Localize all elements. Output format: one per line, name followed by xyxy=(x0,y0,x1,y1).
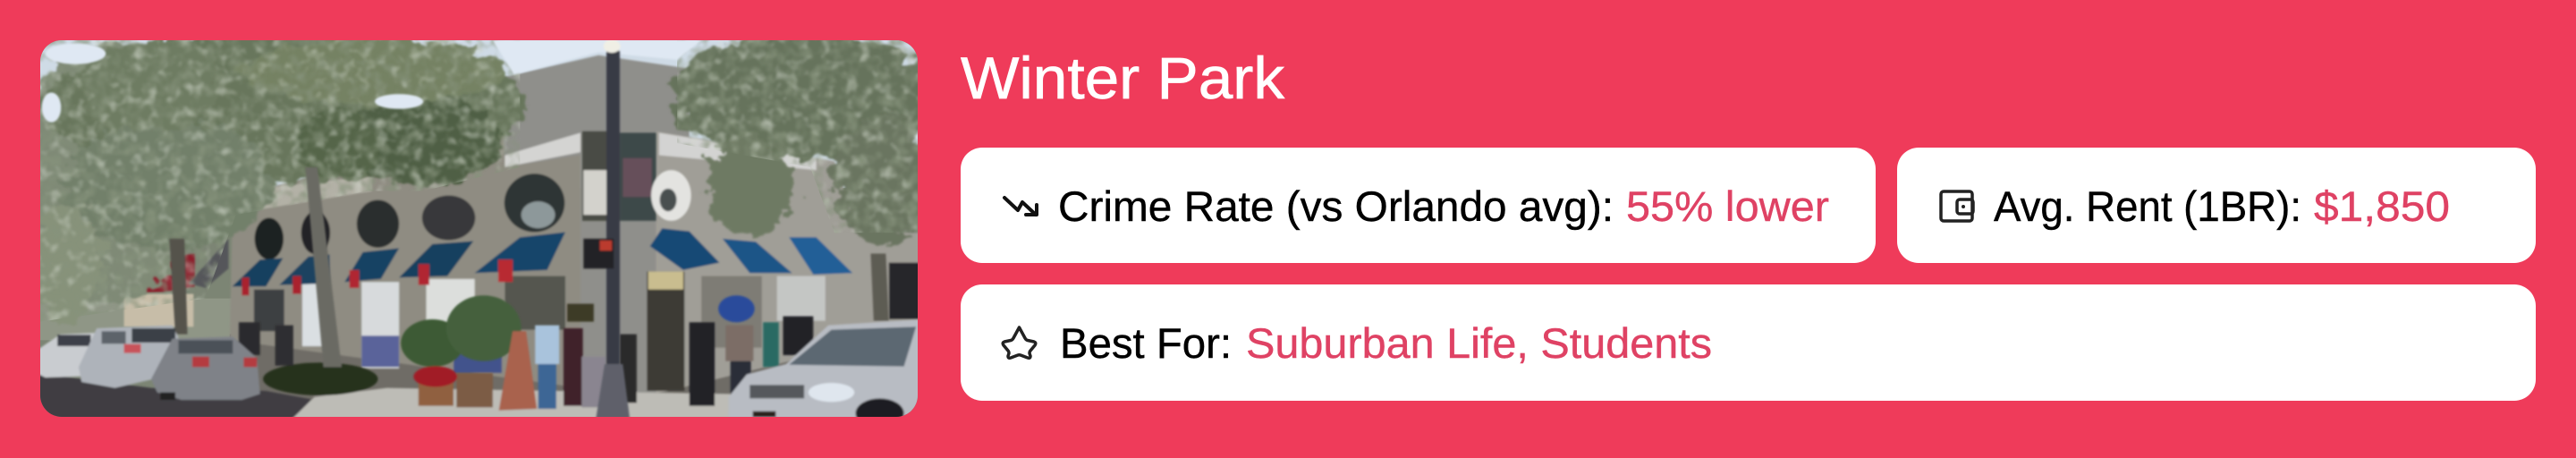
rent label and value: $1,850 xyxy=(2314,182,2450,230)
grey sedan xyxy=(151,336,260,400)
silver SUV xyxy=(79,326,178,388)
balloon display xyxy=(718,295,755,322)
silver Lexus xyxy=(729,319,925,420)
title: Winter Park xyxy=(961,45,1285,111)
left wing windows xyxy=(255,218,284,259)
icon: star xyxy=(1003,327,1036,358)
building upper wall xyxy=(230,125,580,388)
road xyxy=(40,375,311,417)
lamp post and banners xyxy=(582,39,691,420)
tree foliage xyxy=(18,33,937,322)
card: best for xyxy=(961,284,2536,401)
card: crime rate xyxy=(961,148,1876,263)
icon: wallet xyxy=(1941,191,1973,221)
sign xyxy=(499,331,537,411)
storefront glass xyxy=(254,290,284,331)
photo: Winter Park street corner xyxy=(18,33,937,428)
card: average rent xyxy=(1897,148,2536,263)
trunks xyxy=(305,167,342,367)
corner tower xyxy=(502,55,690,394)
rent label and value: Avg. Rent (1BR): xyxy=(1994,182,2301,230)
planting bed xyxy=(263,362,377,395)
crime rate label and value: Crime Rate (vs Orlando avg): xyxy=(1058,182,1614,230)
foliage dappling xyxy=(37,38,925,326)
cornice xyxy=(263,177,372,209)
right wing xyxy=(656,131,925,394)
crime rate label and value: 55% lower xyxy=(1626,182,1829,230)
sky gaps xyxy=(42,40,701,123)
white car xyxy=(37,333,97,377)
photo base tones xyxy=(37,38,925,420)
sidewalk xyxy=(290,388,732,420)
red awning xyxy=(90,254,195,294)
red bows xyxy=(242,277,250,295)
people xyxy=(239,322,260,355)
blue awnings xyxy=(233,259,283,286)
best for label and value: Suburban Life, Students xyxy=(1246,319,1712,367)
icon: trending down arrow xyxy=(1004,198,1037,215)
planters xyxy=(401,319,463,367)
best for label and value: Best For: xyxy=(1060,319,1232,367)
